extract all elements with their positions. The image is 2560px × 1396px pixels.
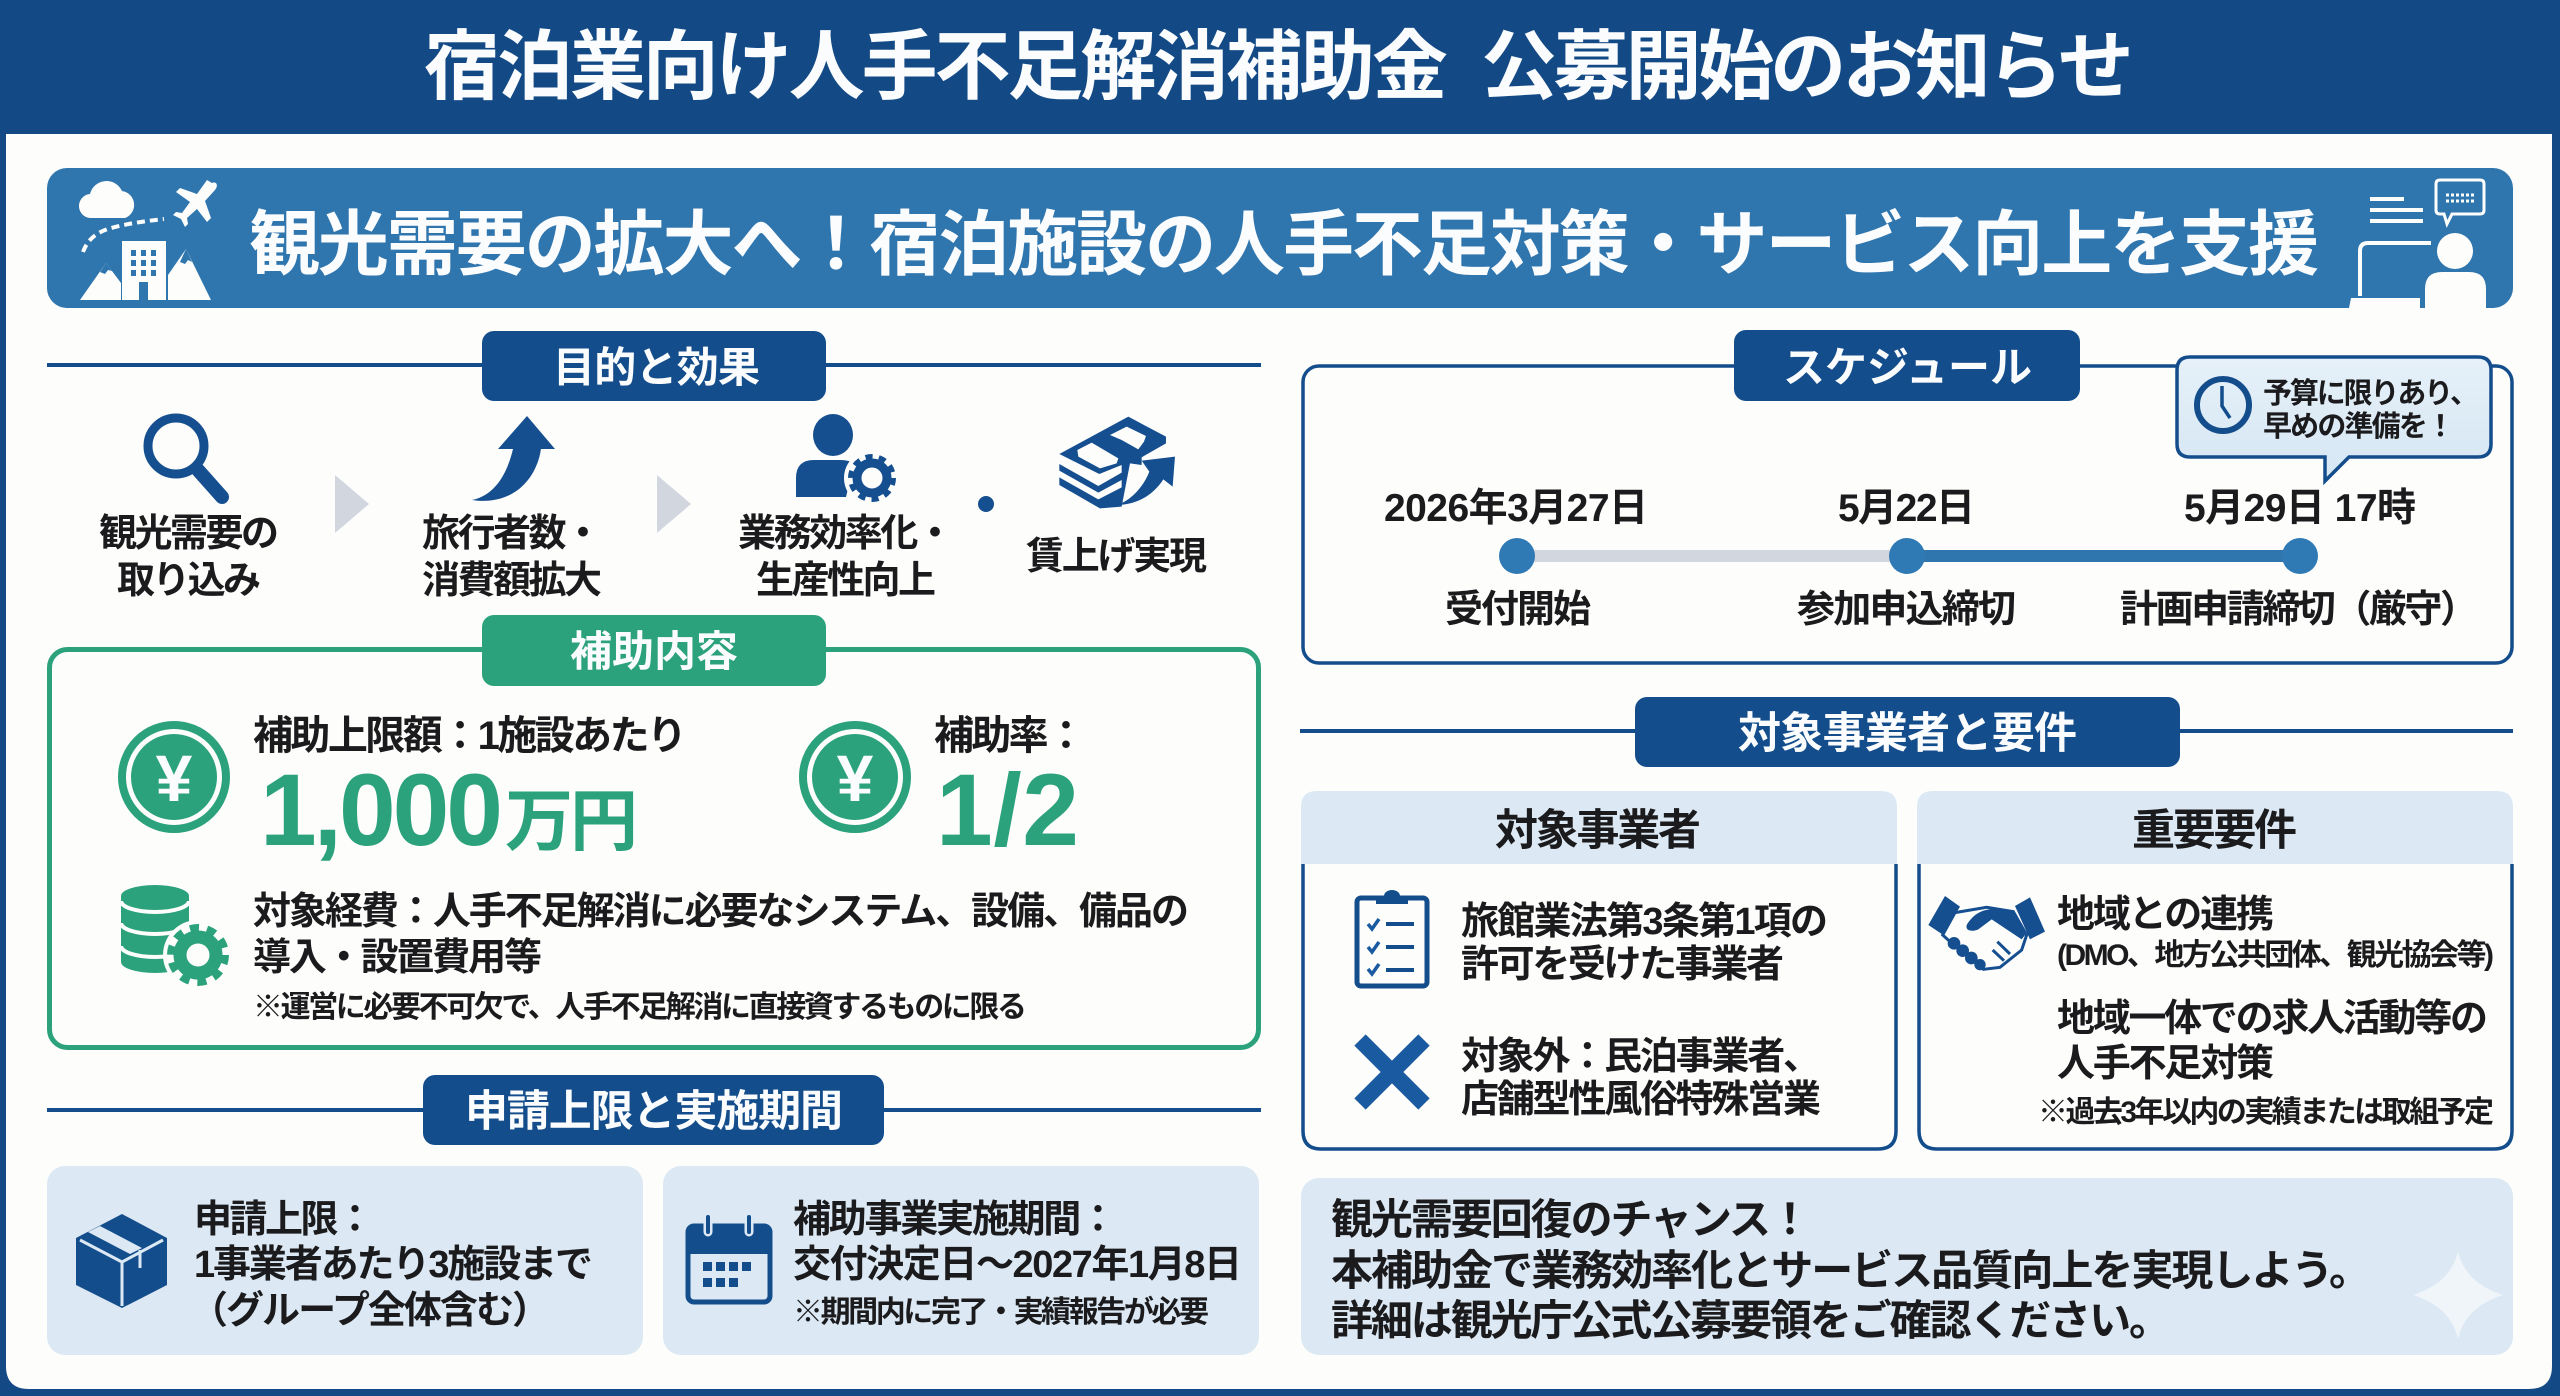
step 1: tourism demand: 取り込み (117, 560, 261, 602)
milestone: start (1384, 487, 1648, 631)
icon: clipboard (1357, 890, 1427, 986)
section heading: purpose and effects: 目的と効果 (553, 344, 760, 391)
icon: travel and hotel (79, 180, 217, 300)
section heading: target businesses and requirements: 対象事業者と要件 (1738, 710, 2077, 758)
milestone: participation deadline: 参加申込締切 (1797, 589, 2016, 631)
step 4: wage increase: 賃上げ実現 (1026, 536, 1207, 578)
callout: limited budget: 早めの準備を！ (2263, 410, 2455, 443)
panel: schedule (1303, 330, 2512, 663)
arrow (335, 475, 369, 533)
banner headline: 観光需要の拡大へ！宿泊施設の人手不足対策・サービス向上を支援 (249, 206, 2319, 285)
arrow (657, 475, 691, 533)
step 3: efficiency and productivity: 業務効率化・ (738, 513, 954, 555)
section heading: target businesses and requirements (1300, 697, 2513, 767)
card: implementation period (663, 1166, 1259, 1355)
title (424, 25, 2134, 110)
eligible text: 許可を受けた事業者 (1461, 944, 1784, 986)
eligible costs: ※運営に必要不可欠で、人手不足解消に直接資するものに限る (253, 991, 1027, 1024)
milestone: plan deadline (2120, 487, 2478, 631)
heading: subsidy content (482, 615, 826, 686)
card text: 申請上限： (194, 1199, 374, 1241)
timeline (1384, 487, 2478, 631)
title: 公募開始のお知らせ (1481, 25, 2134, 110)
excluded text: 対象外：民泊事業者、 (1461, 1036, 1821, 1078)
icon: support person (2349, 180, 2486, 308)
milestone: start: 2026年3月27日 (1384, 487, 1648, 530)
icon: sparkle (2413, 1251, 2503, 1339)
icon: yen coin: ¥ (156, 741, 193, 815)
icon: clock (2197, 379, 2249, 431)
regional collaboration (2057, 894, 2494, 972)
subsidy rate: 1/2 (936, 753, 1079, 867)
step 1: tourism demand: 観光需要の (99, 513, 279, 555)
eligible costs (253, 891, 1189, 1024)
regional recruiting: 人手不足対策 (2057, 1043, 2274, 1085)
section heading: application limit and period: 申請上限と実施期間 (465, 1088, 843, 1136)
milestone: participation deadline: 5月22日 (1838, 487, 1975, 530)
closing message: 観光需要回復のチャンス！ (1331, 1196, 1811, 1243)
title: 宿泊業向け人手不足解消補助金 (424, 25, 1448, 110)
step 4: wage increase (1026, 417, 1207, 578)
maximum amount: 1,000 (260, 753, 503, 867)
subsidy rate: 補助率： (934, 714, 1086, 758)
panel: target businesses (1301, 791, 1897, 1149)
milestone: start: 受付開始 (1445, 589, 1591, 631)
heading: subsidy content: 補助内容 (570, 628, 738, 675)
excluded text: 店舗型性風俗特殊営業 (1461, 1079, 1821, 1121)
card text: （グループ全体含む） (190, 1290, 550, 1332)
icon: database and gear (121, 885, 233, 990)
panel: key requirements (1917, 791, 2513, 1149)
eligible costs: 対象経費：人手不足解消に必要なシステム、設備、備品の (253, 891, 1189, 933)
icon: calendar (686, 1217, 771, 1302)
excluded text (1461, 1036, 1821, 1121)
card text: 1事業者あたり3施設まで (194, 1244, 593, 1286)
heading: 重要要件 (2132, 807, 2297, 855)
step 3: efficiency and productivity (738, 414, 954, 602)
icon: box (76, 1214, 167, 1308)
card text: ※期間内に完了・実績報告が必要 (793, 1295, 1209, 1329)
closing message: 本補助金で業務効率化とサービス品質向上を実現しよう。 (1331, 1247, 2371, 1294)
milestone: plan deadline: 計画申請締切（厳守） (2120, 589, 2478, 631)
banner (47, 168, 2513, 308)
heading: schedule (1734, 330, 2080, 401)
regional collaboration: 地域との連携 (2057, 894, 2274, 936)
heading: 対象事業者 (1495, 807, 1701, 855)
step 2: travellers and spending (422, 416, 602, 602)
eligible text (1461, 901, 1828, 986)
regional recruiting: ※過去3年以内の実績または取組予定 (2038, 1096, 2494, 1129)
icon: yen coin (122, 725, 226, 829)
step 2: travellers and spending: 消費額拡大 (422, 560, 602, 602)
callout: limited budget: 予算に限りあり、 (2263, 377, 2479, 410)
card text: 交付決定日～2027年1月8日 (793, 1244, 1242, 1286)
separator dot (978, 496, 994, 512)
eligible costs: 導入・設置費用等 (253, 937, 542, 979)
icon: yen coin: ¥ (837, 741, 874, 815)
closing message: 詳細は観光庁公式公募要領をご確認ください。 (1331, 1297, 2171, 1344)
card text (793, 1199, 1242, 1329)
milestone: plan deadline: 5月29日 17時 (2184, 487, 2416, 530)
maximum amount (253, 714, 687, 867)
step 2: travellers and spending: 旅行者数・ (422, 513, 602, 555)
section heading: application limit and period (47, 1075, 1261, 1145)
card text (190, 1199, 593, 1332)
card text: 補助事業実施期間： (793, 1199, 1117, 1241)
section heading: purpose and effects (47, 331, 1261, 401)
regional recruiting (2038, 998, 2494, 1129)
regional collaboration: (DMO、地方公共団体、観光協会等) (2057, 939, 2494, 972)
step 1: tourism demand (99, 418, 279, 602)
callout: limited budget (2177, 357, 2491, 481)
panel: subsidy content (50, 615, 1258, 1048)
closing message (1301, 1178, 2513, 1355)
milestone: participation deadline (1797, 487, 2016, 631)
heading: schedule: スケジュール (1783, 344, 2032, 391)
eligible text: 旅館業法第3条第1項の (1461, 901, 1828, 943)
maximum amount: 補助上限額：1施設あたり (253, 714, 687, 758)
step 3: efficiency and productivity: 生産性向上 (756, 560, 936, 602)
process flow (99, 414, 1207, 602)
regional recruiting: 地域一体での求人活動等の (2057, 998, 2488, 1040)
maximum amount: 万円 (505, 784, 638, 860)
icon: cross (1360, 1040, 1424, 1104)
icon: handshake (1928, 896, 2045, 970)
card: application limit (47, 1166, 643, 1355)
icon: yen coin (803, 725, 907, 829)
